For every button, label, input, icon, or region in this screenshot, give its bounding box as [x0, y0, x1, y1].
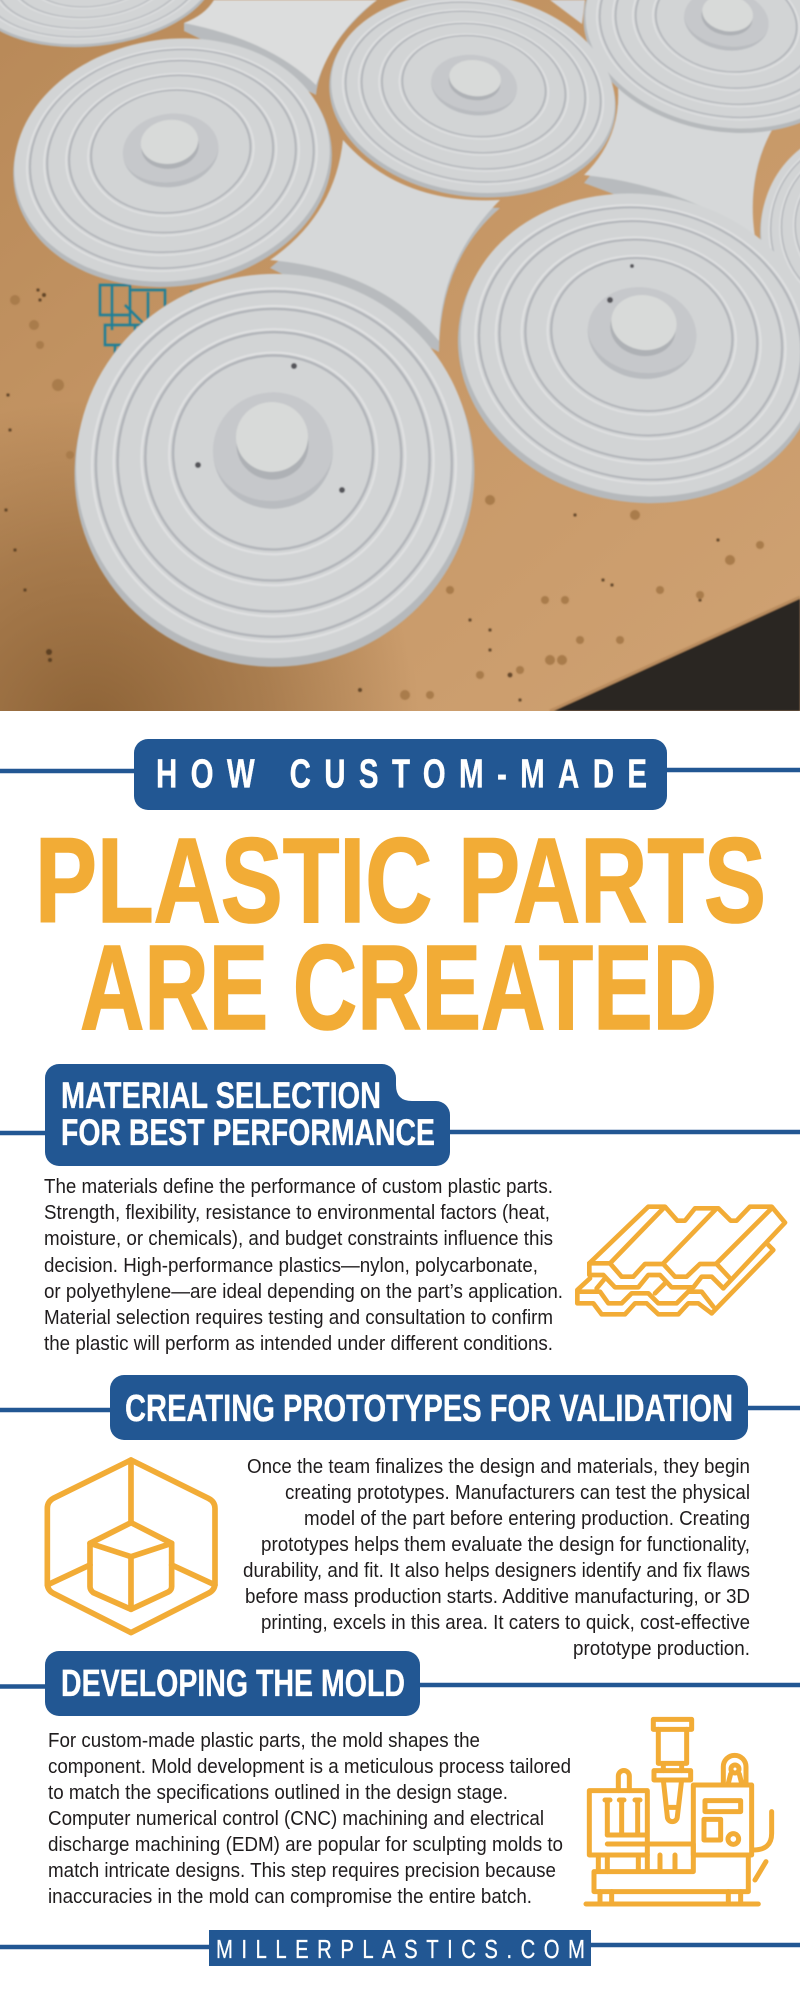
photo: machined plastic discs on a spoilboard	[0, 0, 800, 711]
body text: material selection: The materials define the performance of custom plastic parts.	[44, 1176, 553, 1198]
footer line	[0, 1945, 800, 1947]
heading: material selection: MATERIAL SELECTION	[61, 1075, 381, 1116]
body text: mold: to match the specifications outlined in the design stage.	[48, 1782, 508, 1804]
body text: prototypes: Once the team finalizes the design and materials, they begin	[247, 1456, 750, 1478]
heading: developing the mold: DEVELOPING THE MOLD	[61, 1663, 405, 1705]
body text: prototypes: printing, excels in this area. It caters to quick, cost-effective	[261, 1612, 750, 1634]
section line: mold	[0, 1685, 800, 1686]
title: plastic parts are created	[35, 812, 766, 1055]
body text: material selection: or polyethylene—are ideal depending on the part’s application.	[44, 1281, 563, 1303]
body text: material selection	[44, 1176, 563, 1355]
heading: material selection: FOR BEST PERFORMANCE	[61, 1112, 435, 1153]
body text: material selection: Strength, flexibility, resistance to environmental factors (heat,	[44, 1202, 550, 1224]
body text: prototypes: prototypes helps them evaluate the design for functionality,	[261, 1534, 750, 1556]
body text: prototypes: creating prototypes. Manufacturers can test the physical	[285, 1482, 750, 1504]
icon: injection molding machine	[586, 1719, 772, 1904]
section line: material	[0, 1132, 800, 1133]
body text: mold: Computer numerical control (CNC) machining and electrical	[48, 1808, 544, 1830]
section line: prototypes	[0, 1408, 800, 1410]
body text: mold: discharge machining (EDM) are popular for sculpting molds to	[48, 1834, 563, 1856]
body text: material selection: Material selection requires testing and consultation to confirm	[44, 1307, 553, 1329]
header line	[0, 770, 800, 771]
body text: prototypes: prototype production.	[573, 1638, 750, 1660]
body text: prototypes	[243, 1456, 750, 1660]
icon: cube in 3d space	[47, 1460, 215, 1633]
body text: material selection: the plastic will perform as intended under different conditions.	[44, 1333, 553, 1355]
footer: website: MILLERPLASTICS.COM	[216, 1935, 585, 1964]
body text: mold: component. Mold development is a meticulous process tailored	[48, 1756, 571, 1778]
body text: prototypes: durability, and fit. It also helps designers identify and fix flaws	[243, 1560, 750, 1582]
body text: mold: For custom-made plastic parts, the mold shapes the	[48, 1730, 480, 1752]
body text: mold	[48, 1730, 571, 1908]
header pill: how custom-made: HOW CUSTOM-MADE	[156, 751, 647, 797]
body text: prototypes: model of the part before entering production. Creating	[304, 1508, 750, 1530]
heading: material selection	[45, 1064, 450, 1166]
body text: material selection: moisture, or chemicals), and budget constraints influence this	[44, 1228, 553, 1250]
heading: creating prototypes	[110, 1375, 748, 1440]
icon: stacked corrugated sheets	[577, 1207, 785, 1314]
header pill: how custom-made	[134, 739, 667, 810]
body text: material selection: decision. High-performance plastics—nylon, polycarbonate,	[44, 1255, 538, 1277]
body text: mold: inaccuracies in the mold can compromise the entire batch.	[48, 1886, 532, 1908]
heading: developing the mold	[45, 1651, 420, 1716]
body text: prototypes: before mass production starts. Additive manufacturing, or 3D	[245, 1586, 750, 1608]
body text: mold: match intricate designs. This step requires precision because	[48, 1860, 556, 1882]
